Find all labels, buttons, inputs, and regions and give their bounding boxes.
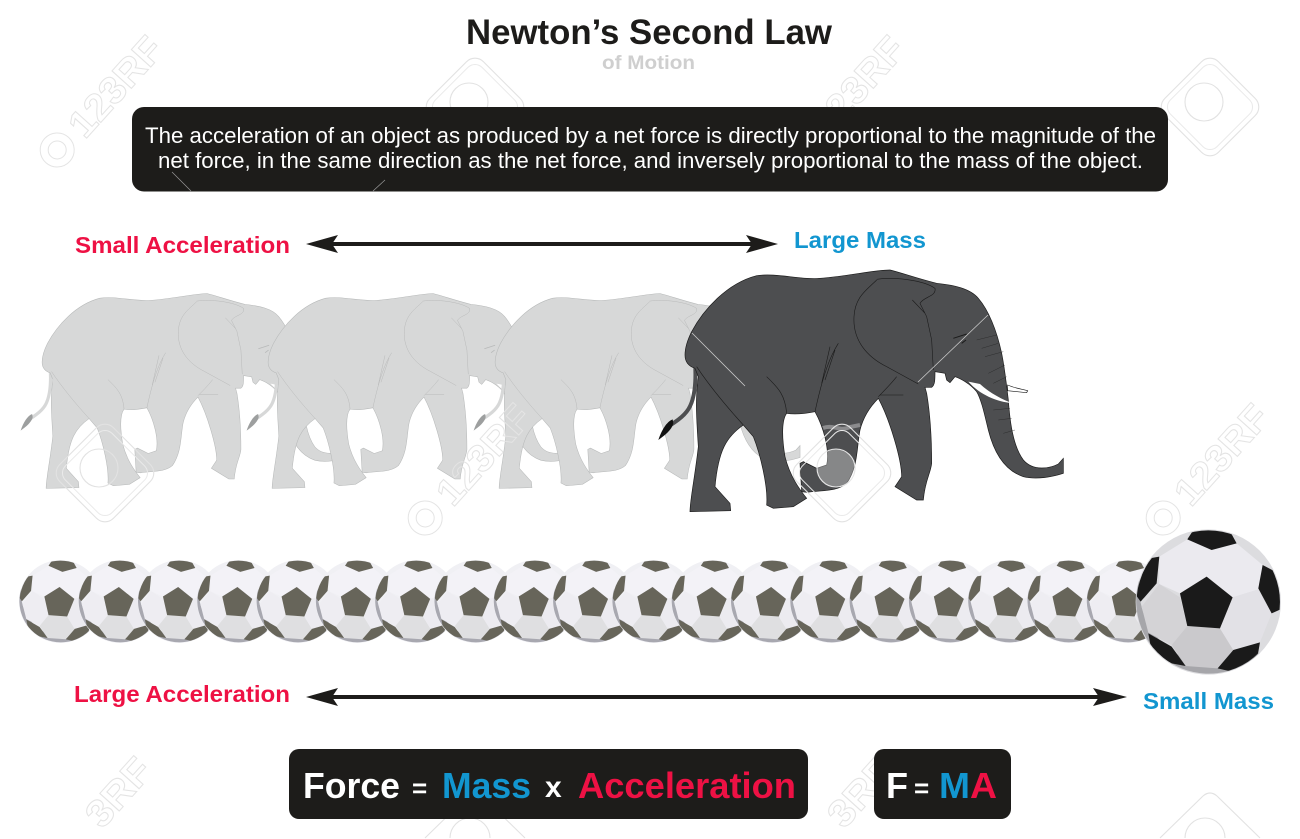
formula: F equals MA bbox=[874, 749, 1011, 819]
faded elephant 2 bbox=[247, 294, 573, 488]
formula: F equals MA: A bbox=[970, 765, 997, 806]
formula: force equals mass times acceleration: x bbox=[545, 771, 562, 804]
formula: force equals mass times acceleration: Mass bbox=[442, 765, 531, 806]
faded elephant 3 bbox=[474, 294, 800, 488]
label: large acceleration: Large Acceleration bbox=[74, 681, 290, 707]
panel: law definition: net force, in the same direction as the net force, and inversely proportional to the mass of the object. bbox=[158, 148, 1143, 173]
faded elephant 1 bbox=[21, 294, 347, 488]
elephant trail bbox=[21, 270, 1063, 512]
soccer ball trail bbox=[16, 558, 1173, 643]
formula: force equals mass times acceleration: Acceleration bbox=[578, 765, 796, 806]
formula: force equals mass times acceleration bbox=[289, 749, 808, 819]
formula: F equals MA: F bbox=[886, 765, 908, 806]
formula: force equals mass times acceleration: Force bbox=[303, 765, 400, 806]
dark elephant bbox=[658, 270, 1063, 512]
panel: law definition: The acceleration of an object as produced by a net force is directly proportional to the magnitude of the bbox=[145, 123, 1156, 148]
formula: F equals MA: M bbox=[939, 765, 970, 806]
panel: law definition bbox=[132, 107, 1168, 192]
subtitle: of Motion bbox=[602, 53, 695, 74]
soccer ball: solid bbox=[1130, 525, 1287, 675]
label: small acceleration: Small Acceleration bbox=[75, 232, 290, 258]
arrow: ball motion span bbox=[306, 688, 1127, 706]
formula: F equals MA: = bbox=[914, 773, 929, 803]
watermark overlay: 3RF bbox=[77, 750, 161, 836]
watermark overlay: 3RF bbox=[819, 750, 903, 836]
label: large mass: Large Mass bbox=[794, 227, 926, 253]
arrow: elephant motion span bbox=[306, 235, 778, 253]
title: Newton’s Second Law bbox=[466, 13, 833, 52]
formula: force equals mass times acceleration: = bbox=[412, 773, 427, 803]
label: small mass: Small Mass bbox=[1143, 688, 1274, 714]
